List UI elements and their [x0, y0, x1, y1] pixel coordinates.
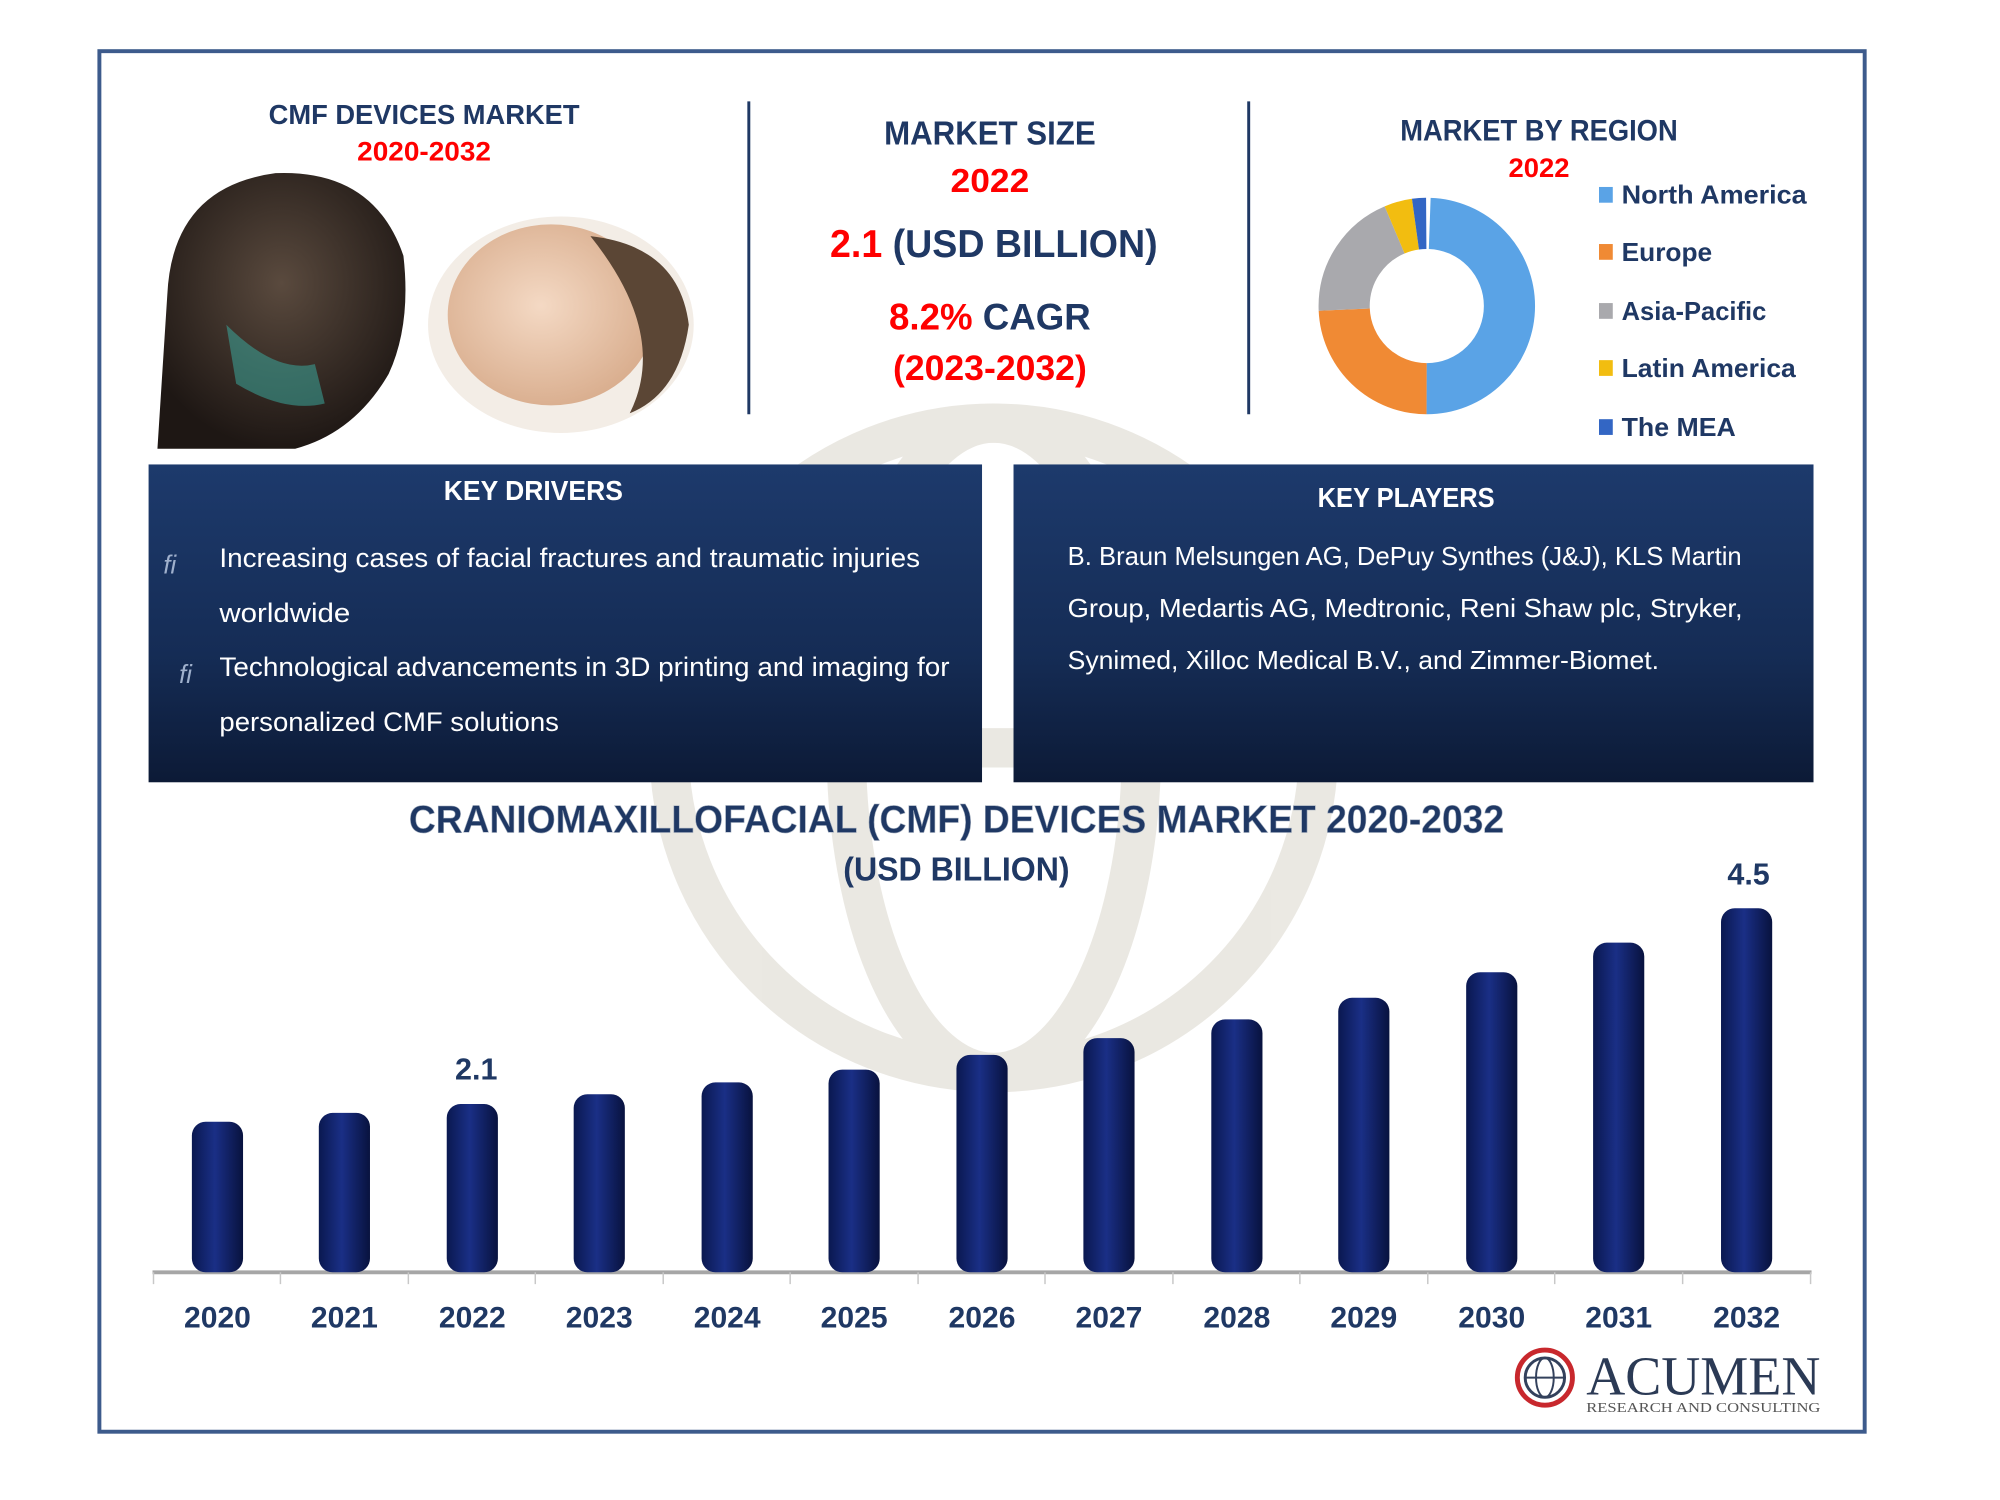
panel: key drivers: ﬁ	[163, 552, 177, 580]
panel: key drivers: personalized CMF solutions	[219, 707, 559, 737]
panel: key drivers: Technological advancements in 3D printing and imaging for	[219, 652, 950, 682]
panel: CMF devices market header: 2020-2032	[357, 136, 491, 166]
panel: key drivers	[149, 464, 982, 782]
panel: key players	[1014, 464, 1814, 782]
bar chart: 2.1	[455, 1052, 497, 1086]
panel: market size: 2.1 (USD BILLION)	[830, 222, 1158, 266]
legend	[1599, 182, 1807, 442]
bar chart: 2030	[1458, 1301, 1525, 1334]
panel: key players: Group, Medartis AG, Medtronic, Reni Shaw plc, Stryker,	[1068, 595, 1743, 623]
panel: key players: B. Braun Melsungen AG, DePuy Synthes (J&J), KLS Martin	[1068, 543, 1742, 571]
bar chart: 2027	[1076, 1301, 1142, 1334]
logo: Acumen: RESEARCH AND CONSULTING	[1586, 1400, 1820, 1415]
divider lines	[747, 101, 750, 414]
legend: The MEA	[1622, 414, 1736, 442]
bar chart	[153, 858, 1812, 1334]
panel: key drivers: ﬁ	[179, 661, 193, 689]
panel: CMF devices market header: CMF DEVICES MARKET	[269, 99, 580, 130]
panel: market size: 8.2% CAGR	[889, 296, 1091, 338]
bar chart: 2024	[694, 1301, 761, 1334]
panel: market size: 2022	[951, 163, 1029, 200]
donut chart	[1344, 223, 1509, 389]
bar chart: 2026	[949, 1301, 1015, 1334]
chart title	[409, 797, 1504, 889]
bar chart: 2021	[311, 1301, 378, 1334]
panel: key drivers: KEY DRIVERS	[444, 475, 623, 506]
bar chart: 2025	[821, 1301, 888, 1334]
legend: Latin America	[1622, 355, 1797, 383]
panel: key players: KEY PLAYERS	[1318, 482, 1495, 513]
logo: Acumen	[1517, 1345, 1820, 1415]
bar chart: 2031	[1585, 1301, 1652, 1334]
legend: North America	[1622, 182, 1807, 210]
legend: Asia-Pacific	[1622, 298, 1766, 326]
bar chart: 2032	[1713, 1301, 1780, 1334]
image: baby	[428, 216, 694, 433]
panel: market by region: 2022	[1508, 153, 1569, 183]
panel: market size	[830, 116, 1158, 388]
bar chart: 2023	[566, 1301, 633, 1334]
chart title: (USD BILLION)	[843, 852, 1070, 889]
panel: market by region: MARKET BY REGION	[1400, 115, 1678, 148]
bar chart: 4.5	[1727, 858, 1770, 892]
logo: Acumen: ACUMEN	[1586, 1345, 1820, 1406]
panel: market by region	[1344, 115, 1807, 442]
bar chart: 2028	[1203, 1301, 1270, 1334]
bar chart: 2022	[439, 1301, 506, 1334]
panel: market size: (2023-2032)	[893, 348, 1087, 388]
panel: key drivers: worldwide	[218, 598, 350, 628]
image: woman face	[157, 173, 405, 449]
chart title: CRANIOMAXILLOFACIAL (CMF) DEVICES MARKET 2020-2032	[409, 797, 1504, 841]
panel: key drivers: Increasing cases of facial fractures and traumatic injuries	[219, 543, 920, 573]
watermark globe	[669, 423, 1319, 1073]
panel: CMF devices market header	[269, 99, 580, 166]
bar chart: 2020	[184, 1301, 251, 1334]
panel: key players: Synimed, Xilloc Medical B.V., and Zimmer-Biomet.	[1068, 647, 1659, 675]
legend: Europe	[1622, 239, 1712, 267]
panel: market size: MARKET SIZE	[884, 116, 1096, 153]
bar chart: 2029	[1330, 1301, 1397, 1334]
